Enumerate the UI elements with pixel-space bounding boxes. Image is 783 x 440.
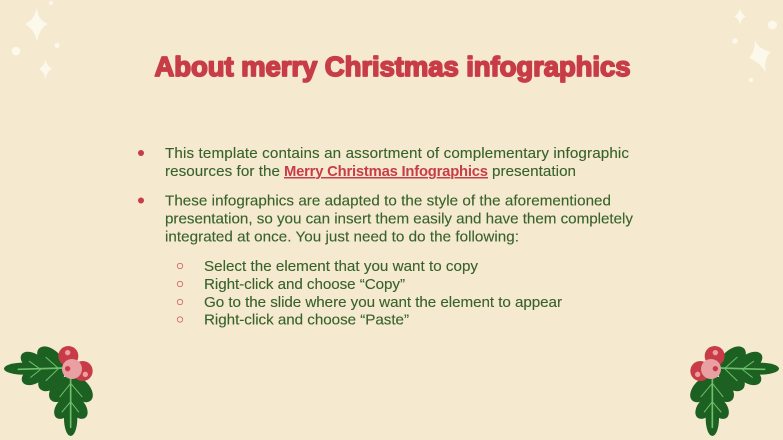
sparkles: top left: [12, 1, 59, 79]
sub-item: go to slide: Go to the slide where you want the element to appear: [204, 294, 562, 311]
bullet 2 text: [165, 192, 633, 246]
bullet 1 text: resources for the: [165, 163, 280, 180]
holly ornament: bottom right: [685, 341, 779, 436]
bullet 1 text: This template contains an assortment of complementary infographic: [165, 145, 629, 162]
sparkles: top right: [732, 8, 777, 82]
holly ornament: bottom left: [4, 341, 98, 436]
bullet 2 text: presentation, so you can insert them easily and have them completely: [165, 210, 633, 228]
bullet 1 marker: [138, 150, 144, 156]
sub-item: select: Select the element that you want to copy: [204, 258, 478, 275]
bullet list: [138, 145, 633, 328]
bullet 2 text: integrated at once. You just need to do the following:: [165, 228, 519, 246]
bullet 1 text: presentation: [492, 163, 576, 180]
sub-item: paste: Right-click and choose “Paste”: [204, 312, 409, 328]
bullet 1 text: Merry Christmas Infographics: [284, 164, 488, 180]
sub-item: copy: Right-click and choose “Copy”: [204, 276, 405, 293]
bullet 1 text: [165, 145, 629, 180]
bullet 2 marker: [138, 198, 144, 204]
bullet 2 text: These infographics are adapted to the style of the aforementioned: [165, 192, 611, 210]
title: About merry Christmas infographics: [154, 51, 630, 82]
